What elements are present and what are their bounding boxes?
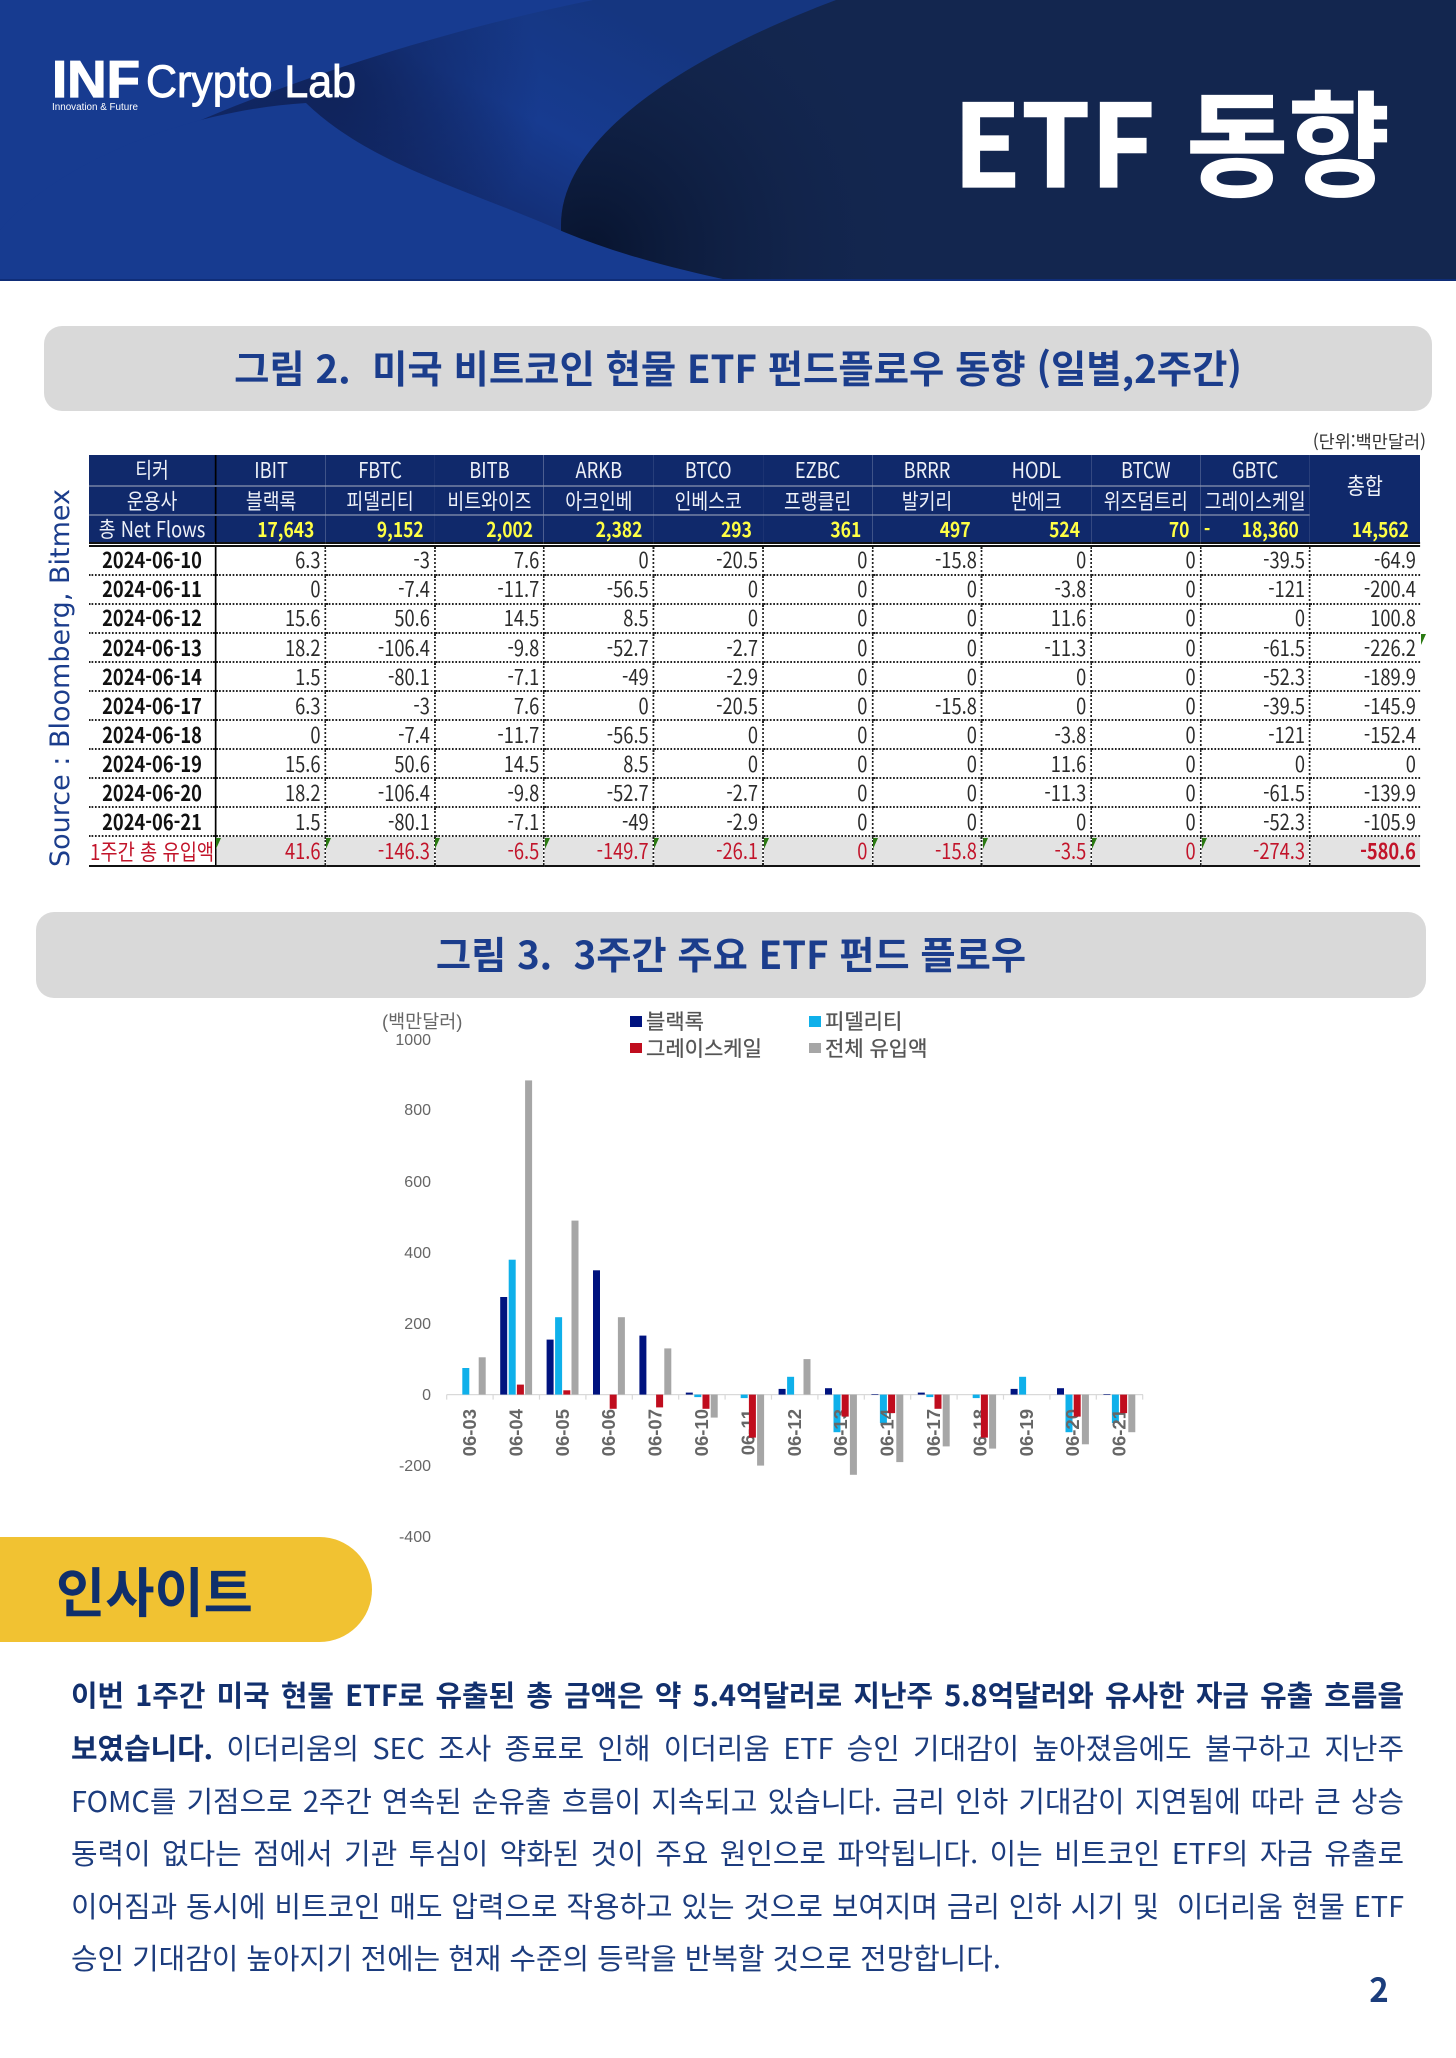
row: tickers: GBTC [1232, 455, 1278, 485]
row: tickers: BTCW [1121, 455, 1171, 485]
insight paragraph [71, 1674, 1404, 1978]
bar chart: ETF flows over 3 weeks [382, 1011, 1144, 1546]
header banner [0, 0, 1456, 281]
row: tickers: HODL [1012, 455, 1061, 485]
heading: figure 2: 그림 2. 미국 비트코인 현물 ETF 펀드플로우 동향 (일별,2주간) [234, 339, 1242, 395]
y axis labels: -200 [399, 1458, 431, 1475]
source label: Source : Bloomberg, Bitmex [45, 489, 76, 867]
row: tickers: FBTC [358, 455, 402, 485]
x axis date labels: 06-05 [552, 1409, 573, 1456]
row: tickers: IBIT [254, 455, 288, 485]
series: total flow [479, 1080, 1135, 1475]
heading: figure 3 [36, 912, 1426, 998]
insight badge [0, 1537, 372, 1642]
heading: figure 3: 그림 3. 3주간 주요 ETF 펀드 플로우 [436, 926, 1026, 981]
x axis date labels: 06-17 [923, 1409, 944, 1456]
x axis date labels: 06-10 [691, 1409, 712, 1456]
x axis date labels: 06-04 [505, 1408, 526, 1456]
row: tickers: 티커 [135, 455, 169, 485]
row: tickers [89, 455, 1420, 515]
insight paragraph: 보였습니다. 이더리움의 SEC 조사 종료로 인해 이더리움 ETF 승인 기대감이 높아졌음에도 불구하고 지난주 [71, 1727, 1404, 1768]
x axis date labels: 06-11 [737, 1409, 758, 1455]
legend: 블랙록 [646, 1011, 704, 1034]
insight heading: 인사이트 [56, 1551, 253, 1628]
foreground blue layer [0, 103, 732, 281]
x axis date labels: 06-19 [1016, 1409, 1037, 1456]
row: weekly total [90, 836, 1420, 866]
y axis labels [395, 1032, 431, 1546]
row: tickers: BRRR [904, 455, 950, 485]
legend: 피델리티 [825, 1011, 902, 1034]
logo [52, 51, 356, 113]
row: managers [89, 486, 1310, 514]
main title: ETF 동향 [953, 55, 1390, 220]
row: tickers: BITB [469, 455, 510, 485]
legend: 그레이스케일 [646, 1038, 762, 1061]
row: tickers: EZBC [795, 455, 840, 485]
y axis unit: (백만달러) [382, 1011, 462, 1032]
x axis date labels: 06-14 [877, 1408, 898, 1456]
legend [630, 1011, 927, 1061]
insight paragraph: 승인 기대감이 높아지기 전에는 현재 수준의 등락을 반복할 것으로 전망합니다. [71, 1937, 1001, 1978]
row: total net flows [89, 514, 1420, 542]
x axis date labels: 06-03 [459, 1409, 480, 1456]
x axis date labels: 06-07 [645, 1409, 666, 1456]
series: fidelity [462, 1260, 1119, 1432]
row: tickers: ARKB [576, 455, 622, 485]
y axis labels: 800 [404, 1102, 431, 1119]
series: blackrock [500, 1270, 1110, 1395]
x axis date labels: 06-18 [969, 1409, 990, 1456]
logo: INF [52, 51, 140, 109]
series: grayscale [517, 1385, 1127, 1438]
mid blue layer [0, 0, 1456, 281]
table: ETF daily flows [89, 455, 1420, 867]
y axis labels: -400 [399, 1529, 431, 1546]
zero axis [447, 1395, 1143, 1400]
row: tickers: 총합 [1347, 467, 1383, 501]
insight paragraph: 동력이 없다는 점에서 기관 투심이 약화된 것이 주요 원인으로 파악됩니다. 이는 비트코인 ETF의 자금 유출로 [71, 1832, 1404, 1873]
insight paragraph: FOMC를 기점으로 2주간 연속된 순유출 흐름이 지속되고 있습니다. 금리 인하 기대감이 지연됨에 따라 큰 상승 [71, 1780, 1404, 1820]
green cell markers [216, 634, 1426, 849]
page number: 2 [1369, 1964, 1389, 2012]
y axis labels: 400 [404, 1245, 431, 1262]
x axis date labels: 06-21 [1109, 1409, 1130, 1456]
y axis labels: 200 [404, 1316, 431, 1333]
logo: Innovation & Future [52, 102, 138, 113]
logo: Crypto Lab [146, 56, 356, 107]
y axis labels: 1000 [395, 1032, 431, 1049]
unit note: (단위:백만달러) [1313, 429, 1426, 454]
navy circle layer [561, 0, 1456, 281]
insight paragraph: 이번 1주간 미국 현물 ETF로 유출된 총 금액은 약 5.4억달러로 지난주 5.8억달러와 유사한 자금 유출 흐름을 [71, 1674, 1404, 1715]
y axis labels: 600 [404, 1174, 431, 1191]
x axis date labels [459, 1408, 1130, 1456]
insight paragraph: 이어짐과 동시에 비트코인 매도 압력으로 작용하고 있는 것으로 보여지며 금리 인하 시기 및 이더리움 현물 ETF [71, 1885, 1404, 1926]
legend: 전체 유입액 [825, 1038, 927, 1061]
x axis date labels: 06-13 [830, 1409, 851, 1456]
x axis date labels: 06-20 [1062, 1409, 1083, 1456]
y axis labels: 0 [422, 1387, 431, 1404]
heading: figure 2 [44, 326, 1432, 411]
x axis date labels: 06-12 [784, 1409, 805, 1456]
row: tickers: BTCO [685, 455, 732, 485]
x axis date labels: 06-06 [598, 1409, 619, 1456]
